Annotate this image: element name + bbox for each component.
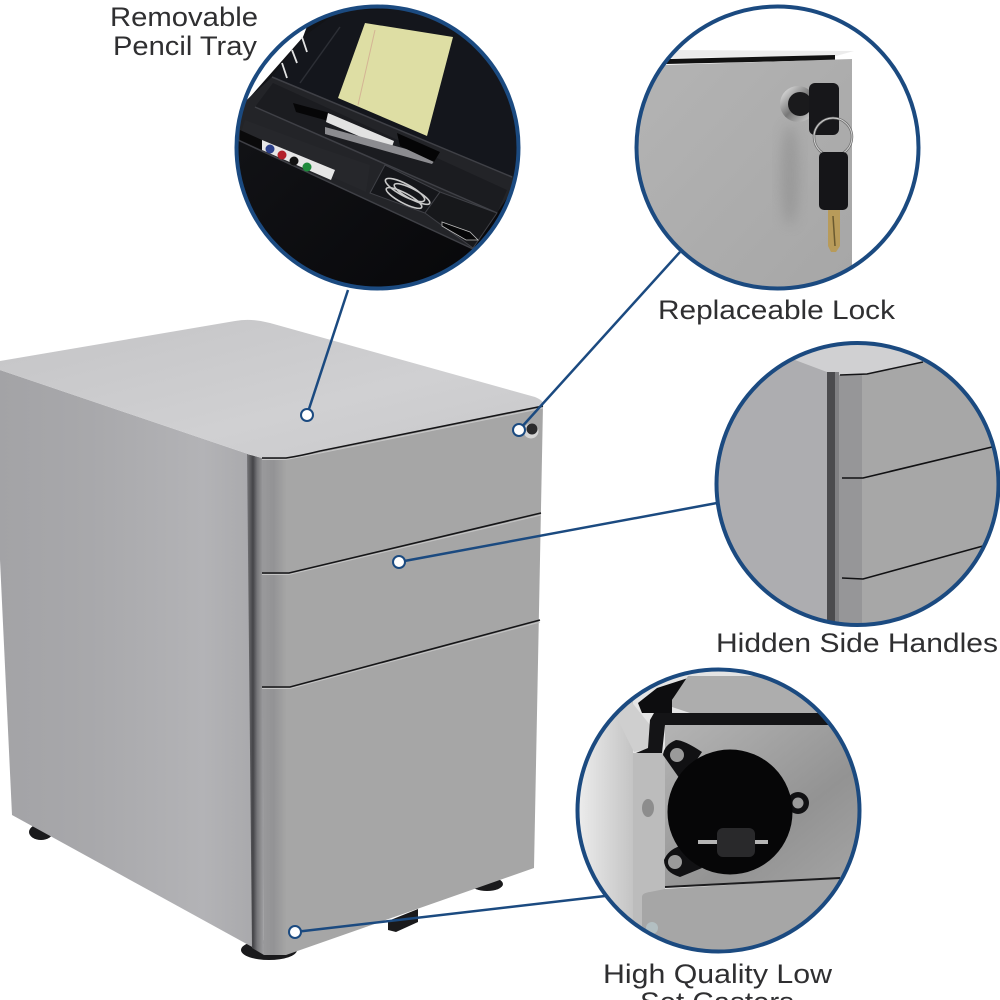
panel: removable pencil tray [230, 0, 530, 300]
tray [238, 77, 514, 249]
ring [236, 6, 518, 288]
callout lines and markers [289, 252, 717, 938]
lock cylinder [780, 86, 809, 122]
cabinet top face [0, 320, 543, 458]
ring [636, 6, 918, 288]
cabinet corner seam [247, 454, 264, 955]
label: hidden side handles: Hidden Side Handles [716, 628, 998, 658]
cabinet front bend [261, 458, 286, 955]
ring [578, 670, 860, 952]
black gap [636, 713, 840, 753]
cabinet [0, 320, 543, 960]
drawer lines [262, 406, 543, 688]
paperclip compartment [370, 165, 440, 213]
label: replaceable lock: Replaceable Lock [658, 295, 896, 325]
pointer: side handles [393, 503, 717, 568]
lock [524, 424, 538, 438]
binder clip [442, 222, 478, 240]
caster wheel [698, 840, 768, 844]
marker set [262, 140, 335, 180]
upper drawer [638, 678, 688, 713]
label: removable pencil tray [110, 2, 258, 61]
panel: hidden side handles [710, 340, 1000, 637]
label: high quality low set casters: High Quality Low [603, 959, 833, 989]
side panel [600, 701, 633, 920]
paper clips [384, 178, 431, 210]
pens [293, 103, 330, 120]
cabinet side face [0, 370, 254, 948]
lower panel [642, 879, 840, 950]
caster mount [663, 740, 702, 877]
notepad [338, 23, 453, 136]
label: removable pencil tray: Removable [110, 2, 258, 32]
label: removable pencil tray: Pencil Tray [113, 31, 258, 61]
pointer: casters [289, 896, 605, 938]
pointer: lock [513, 252, 680, 436]
binder compartment [425, 192, 497, 248]
cabinet feet and caster [29, 824, 503, 960]
ring [716, 343, 998, 625]
cabinet front face [262, 405, 543, 955]
main panel [665, 725, 870, 886]
panel: high quality low set casters [570, 660, 870, 960]
pointer: pencil tray [301, 290, 348, 421]
label: high quality low set casters [603, 959, 833, 1000]
panel: replaceable lock [630, 0, 930, 300]
